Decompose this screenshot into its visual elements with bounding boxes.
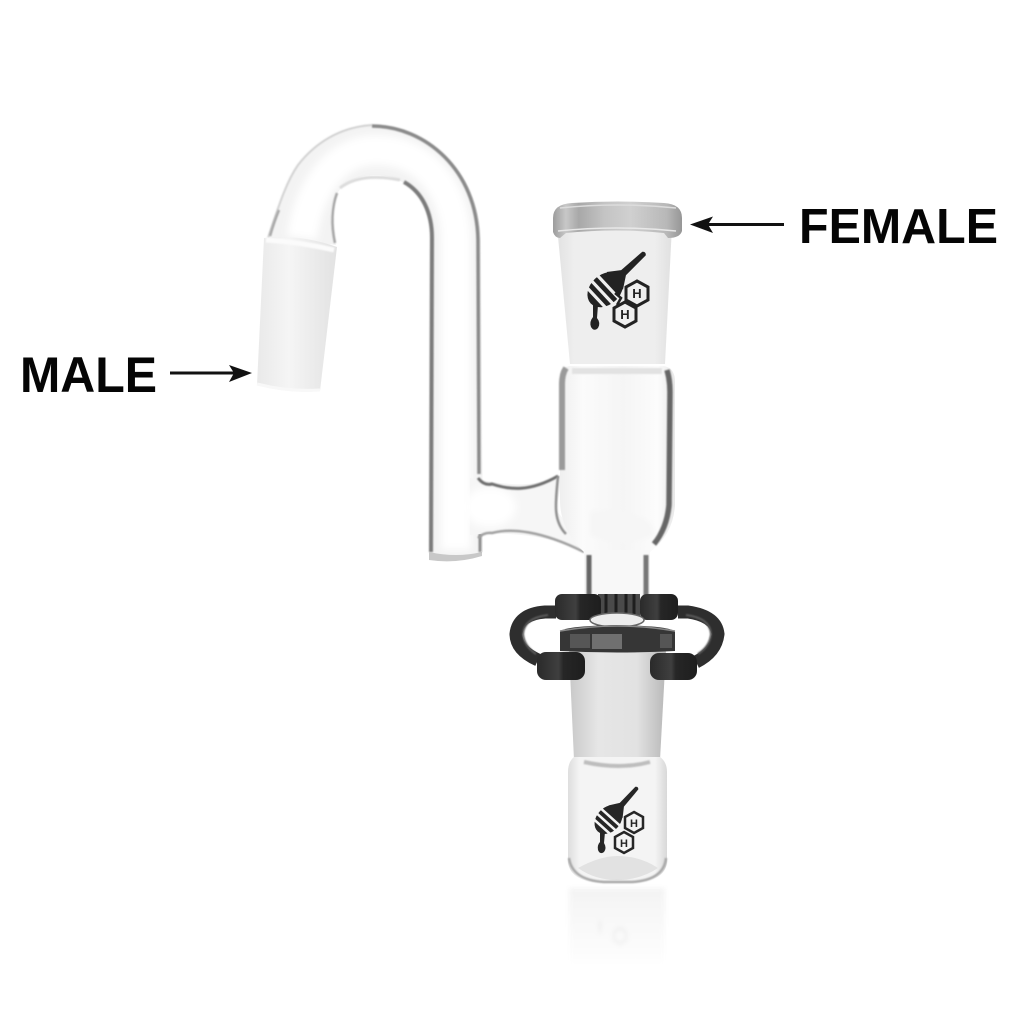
clip ring bbox=[560, 625, 675, 652]
label: MALE: MALE bbox=[20, 347, 157, 403]
label: FEMALE: FEMALE bbox=[799, 200, 998, 254]
left clip handle bbox=[516, 612, 556, 660]
glass J-tube male arm bbox=[268, 125, 483, 561]
logo: honey dipper and hexagons on female joint: H bbox=[632, 286, 642, 301]
hexagons bbox=[615, 293, 621, 305]
right clip handle bbox=[678, 612, 718, 662]
logo: honey dipper and hexagons on female joint bbox=[580, 241, 656, 330]
male frosted joint bbox=[257, 237, 337, 392]
arrow: to female joint bbox=[690, 216, 784, 233]
female rim bbox=[553, 202, 682, 238]
top clip bar bbox=[598, 594, 640, 616]
logo: honey dipper and hexagons on vial: H bbox=[620, 838, 628, 850]
honey drop bbox=[590, 305, 599, 330]
glass chamber bbox=[560, 366, 675, 552]
glass neck bbox=[584, 550, 650, 600]
honey drop bbox=[598, 832, 606, 853]
logo: honey dipper and hexagons on vial: H bbox=[630, 818, 638, 830]
dipper head and handle bbox=[580, 241, 656, 315]
logo: honey dipper and hexagons on vial bbox=[588, 779, 647, 853]
logo: honey dipper and hexagons on female joint: H bbox=[620, 307, 630, 322]
lower clip blocks bbox=[537, 652, 585, 680]
hexagons bbox=[625, 812, 643, 833]
lower frosted joint bbox=[569, 650, 666, 760]
arrow: to male joint bbox=[170, 365, 252, 382]
reflection under the vial bbox=[569, 888, 665, 968]
dipper head and handle bbox=[588, 779, 647, 840]
black clip bbox=[516, 594, 718, 680]
female frosted joint bbox=[557, 226, 672, 364]
side arm connector bbox=[464, 474, 590, 552]
glass disc bbox=[590, 613, 644, 627]
vial bbox=[568, 757, 667, 883]
